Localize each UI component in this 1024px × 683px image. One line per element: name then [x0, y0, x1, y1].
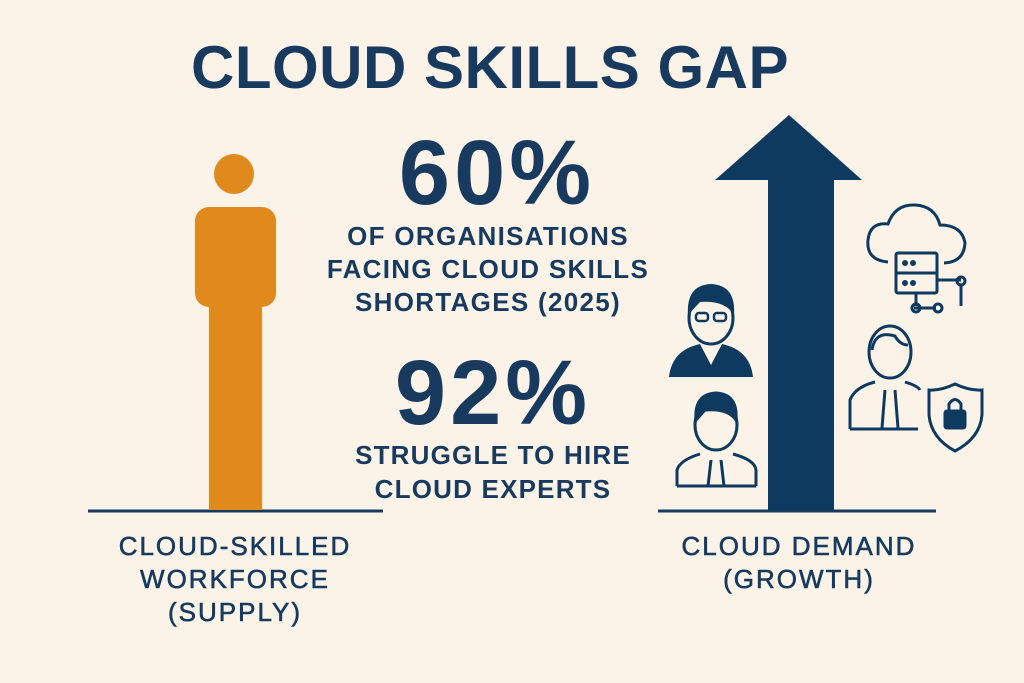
stat text: organisations — [327, 221, 649, 317]
stat text: organisations: OF ORGANISATIONS — [347, 221, 629, 251]
label: supply: (SUPPLY) — [168, 597, 302, 627]
stat text: hire: STRUGGLE TO HIRE — [355, 440, 631, 470]
label: supply: WORKFORCE — [140, 564, 330, 594]
label: supply — [119, 531, 351, 627]
icon: person with glasses — [669, 284, 753, 377]
label: demand: (GROWTH) — [723, 564, 875, 594]
icon: orange person (supply) — [195, 154, 276, 510]
icon: cloud server — [868, 205, 965, 312]
icon: person with shield — [850, 326, 982, 451]
label: supply: CLOUD-SKILLED — [119, 531, 351, 561]
title: CLOUD SKILLS GAP — [191, 34, 789, 101]
stat text: organisations: SHORTAGES (2025) — [355, 287, 621, 317]
stat text: organisations: FACING CLOUD SKILLS — [327, 254, 649, 284]
stat text: hire — [355, 440, 631, 504]
icon: person with tie — [677, 393, 756, 486]
label: demand — [682, 531, 916, 594]
arrow: demand growth — [715, 115, 862, 510]
stat: 60%: 60% — [399, 122, 595, 224]
stat text: hire: CLOUD EXPERTS — [375, 474, 611, 504]
label: demand: CLOUD DEMAND — [682, 531, 916, 561]
stat: 92%: 92% — [395, 342, 591, 444]
